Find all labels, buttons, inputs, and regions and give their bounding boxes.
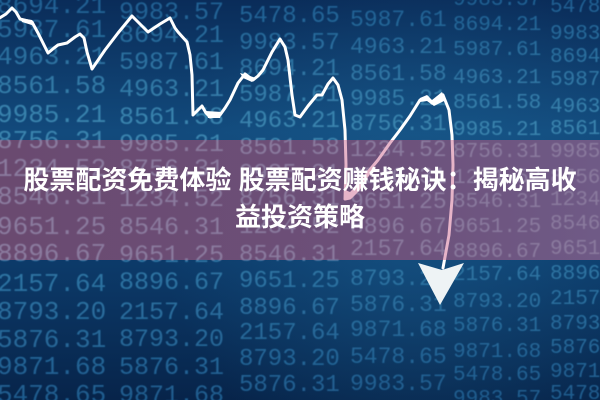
number grid: 1234.52 bbox=[239, 214, 340, 241]
number grid: 8561.58 bbox=[239, 135, 340, 162]
number grid: 5478.65 bbox=[239, 3, 340, 30]
line thick highlights bbox=[20, 18, 446, 200]
number grid: 1234.52 bbox=[453, 167, 541, 190]
number grid: 4963.21 bbox=[350, 34, 447, 60]
number grid: 8793.20 bbox=[239, 346, 340, 373]
number grid: 4963.21 bbox=[0, 42, 106, 72]
number grid: 8694.21 bbox=[239, 56, 340, 83]
number grid: 2157.64 bbox=[119, 298, 224, 327]
title: 股票配资免费体验 股票配资赚钱秘诀：揭秘高收 bbox=[23, 165, 577, 195]
number grid: 8756.31 bbox=[239, 186, 340, 213]
number grid: 8896.67 bbox=[350, 214, 447, 240]
number grid: 4963.21 bbox=[239, 108, 340, 135]
number grid: 9651.25 bbox=[119, 241, 224, 270]
number grid: 2157.64 bbox=[239, 320, 340, 347]
number grid: 5876.31 bbox=[350, 292, 447, 318]
title: 益投资策略 bbox=[235, 202, 365, 232]
number grid: 9983.57 bbox=[350, 371, 447, 397]
number grid: 8896.67 bbox=[453, 241, 541, 264]
number grid: 9985.21 bbox=[0, 100, 106, 130]
number grid: 8546.31 bbox=[350, 164, 447, 190]
number grid: 9651.25 bbox=[239, 268, 340, 295]
number grid: 8546.31 bbox=[453, 191, 541, 214]
number grid: 8896.67 bbox=[119, 268, 224, 297]
number grid: 5987.61 bbox=[239, 82, 340, 109]
number grid: 2157.64 bbox=[0, 269, 106, 299]
title bbox=[23, 165, 577, 232]
number grid: 8896.67 bbox=[0, 239, 106, 269]
number grid: 8546.31 bbox=[239, 242, 340, 269]
number grid: 5987.61 bbox=[350, 7, 447, 33]
number grid: 5987.61 bbox=[119, 48, 224, 77]
number grid: 8561.58 bbox=[453, 92, 541, 115]
number grid: 8561.58 bbox=[119, 103, 224, 132]
number grid: 9651.25 bbox=[0, 212, 106, 242]
number grid: 9985.21 bbox=[119, 130, 224, 159]
number grid: 2157.64 bbox=[350, 236, 447, 262]
number grid: 5876.31 bbox=[453, 315, 541, 338]
number grid: 2157.64 bbox=[453, 264, 541, 287]
number grid: 8793.20 bbox=[119, 325, 224, 354]
number grid: 9871.68 bbox=[0, 352, 106, 382]
number grid: 1234.52 bbox=[119, 185, 224, 214]
number grid: 8546.31 bbox=[0, 182, 106, 212]
number grid: 5478.65 bbox=[350, 344, 447, 370]
number grid: 9985.21 bbox=[350, 86, 447, 112]
number grid: 9985.21 bbox=[453, 119, 541, 142]
number grid: 5876.31 bbox=[0, 325, 106, 355]
number grid: 5478.65 bbox=[453, 364, 541, 387]
number grid: 4963.21 bbox=[119, 75, 224, 104]
number grid: 8561.58 bbox=[0, 71, 106, 101]
number grid: 9651.25 bbox=[453, 216, 541, 239]
number grid: 8756.31 bbox=[453, 141, 541, 164]
number grid: 5987.61 bbox=[0, 15, 106, 45]
number grid: 8546.31 bbox=[119, 213, 224, 242]
number grid: 8756.31 bbox=[0, 126, 106, 156]
number grid: 1234.52 bbox=[350, 137, 447, 163]
number grid: 9985.21 bbox=[239, 161, 340, 188]
number grid: 9871.68 bbox=[350, 317, 447, 343]
number grid: 8756.31 bbox=[119, 155, 224, 184]
number grid: 8793.20 bbox=[453, 291, 541, 314]
number grid: 9983.57 bbox=[239, 30, 340, 57]
number grid: 8694.21 bbox=[453, 14, 541, 37]
number grid: 9651.25 bbox=[350, 189, 447, 215]
banner: translucent purple strip bbox=[0, 140, 600, 260]
number grid: 5876.31 bbox=[239, 372, 340, 399]
number grid: 4963.21 bbox=[453, 67, 541, 90]
falling price line with arrow bbox=[0, 8, 464, 305]
number grid: 5876.31 bbox=[119, 353, 224, 382]
arrow head bbox=[418, 263, 464, 305]
number grid: 5987.61 bbox=[453, 39, 541, 62]
number grid: 9871.68 bbox=[453, 341, 541, 364]
number grid: 8561.58 bbox=[350, 61, 447, 87]
number grid: 8756.31 bbox=[350, 111, 447, 137]
number grid: 8896.67 bbox=[239, 295, 340, 322]
number grid: 8694.21 bbox=[119, 21, 224, 50]
number grid: 8793.20 bbox=[0, 297, 106, 327]
number grid: 8793.20 bbox=[350, 266, 447, 292]
number grid: 1234.52 bbox=[0, 154, 106, 184]
